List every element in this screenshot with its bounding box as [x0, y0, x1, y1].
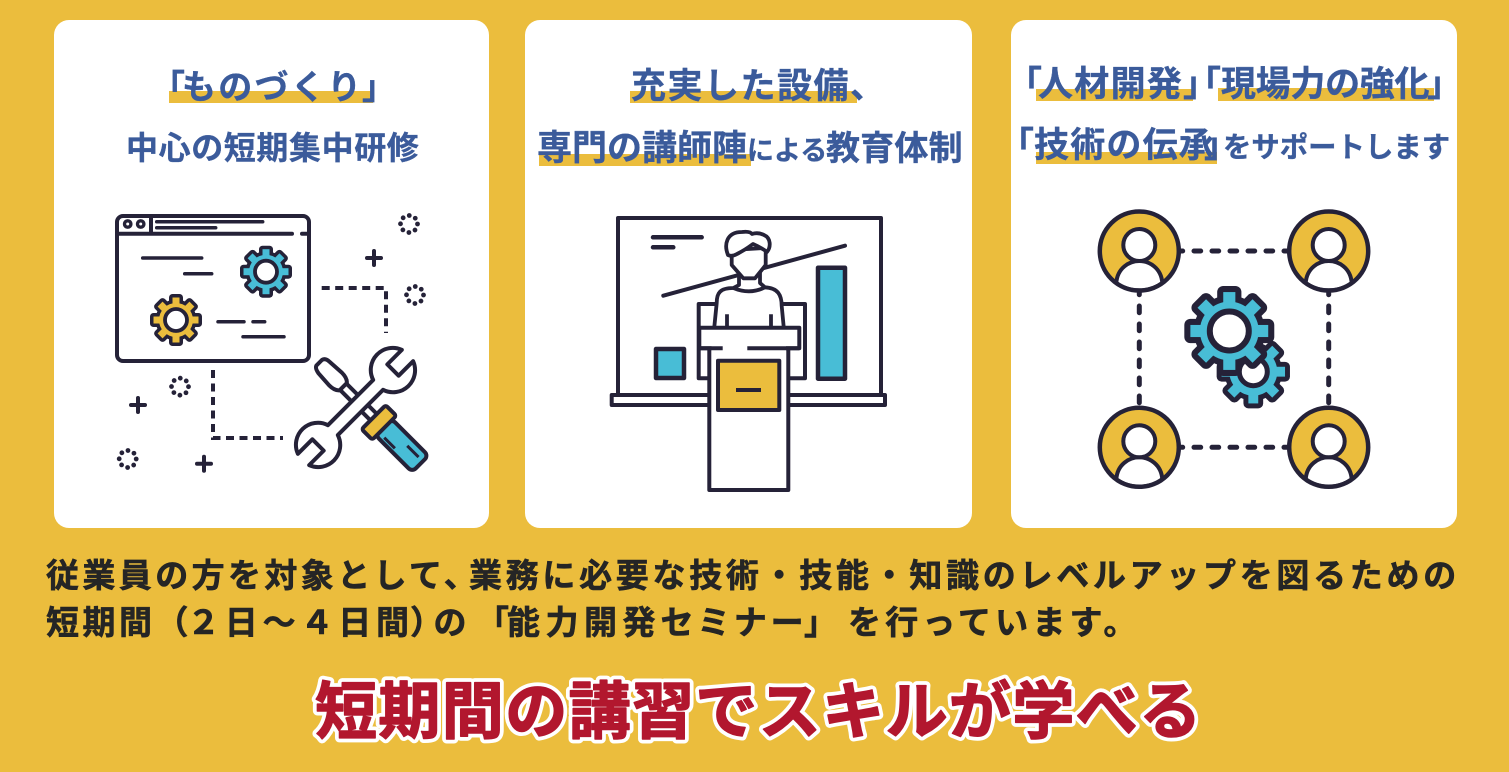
description text: 従業員の方を対象として、: [46, 557, 480, 594]
small gear: [1222, 340, 1285, 403]
podium body: [709, 345, 788, 490]
main title: 短期間の講習でスキルが学べる: [315, 678, 1203, 747]
heading: talent development: をサポートします: [1223, 132, 1450, 164]
heading: talent development: 技術の伝承: [1034, 126, 1215, 165]
heading: monozukuri: 中心の短期集中研修: [126, 130, 419, 166]
podium plate: [718, 361, 779, 410]
wrench: [288, 340, 423, 475]
heading: talent development: 「: [999, 126, 1034, 165]
heading: facilities: 教育体制: [826, 130, 963, 168]
heading: talent development: 「: [1007, 65, 1042, 104]
screwdriver: [307, 351, 432, 476]
description text: ２日～４日間: [187, 604, 414, 641]
whiteboard: [618, 218, 881, 396]
dashed links: [1139, 251, 1329, 447]
gold gear: [154, 298, 198, 342]
heading: facilities: [537, 67, 963, 168]
browser window: [117, 216, 309, 361]
people: [1100, 212, 1179, 290]
heading: monozukuri: 」: [362, 69, 396, 107]
chart bars: [656, 349, 684, 378]
icon: browser window with gears and tools: [117, 216, 432, 476]
lecturer: [714, 232, 784, 330]
description text: を行っています。: [848, 604, 1141, 641]
panel: talent development support: [999, 20, 1462, 528]
heading: talent development: 「: [1186, 65, 1221, 104]
heading: monozukuri: ものづくり: [182, 69, 364, 107]
heading: talent development: 」: [1183, 65, 1218, 104]
icon: connected people and gears: [1100, 212, 1368, 487]
heading: facilities: による: [747, 136, 827, 166]
description text: 能力開発: [507, 604, 661, 641]
heading: talent development: 」: [1427, 65, 1462, 104]
heading: facilities: 充実した設備、: [631, 67, 887, 106]
panel: monozukuri training: [54, 20, 489, 528]
back frame: [699, 304, 805, 378]
description text: 」: [804, 604, 837, 641]
icon: lecturer at podium: [612, 218, 885, 490]
description text: [46, 557, 1460, 641]
description text: 「: [476, 604, 509, 641]
heading: talent development: [999, 65, 1462, 165]
description text: 業務に必要な技術・技能・知識のレベルアップを図るための: [469, 557, 1460, 594]
teal gear: [244, 249, 288, 294]
panel: facilities and instructors: [525, 20, 972, 528]
description text: の: [434, 604, 466, 641]
description text: 短期間（: [46, 604, 192, 641]
podium top: [699, 328, 799, 348]
heading: talent development: 現場力の強化: [1221, 65, 1430, 104]
description text: セミナー: [660, 604, 807, 641]
trend line: [663, 246, 845, 296]
heading: monozukuri: 「: [151, 69, 185, 107]
heading: talent development: 」: [1204, 126, 1239, 165]
description text: ）: [410, 604, 443, 641]
sparkle dots: [119, 216, 423, 468]
plus marks: [131, 251, 381, 471]
dashed connectors: [213, 288, 386, 438]
heading: monozukuri: [126, 69, 419, 166]
main title: 短期間の講習でスキルが学べる: [315, 678, 1203, 747]
heading: facilities: 専門の講師陣: [537, 129, 747, 168]
large gear: [1190, 292, 1268, 370]
heading: talent development: 人材開発: [1038, 65, 1183, 104]
